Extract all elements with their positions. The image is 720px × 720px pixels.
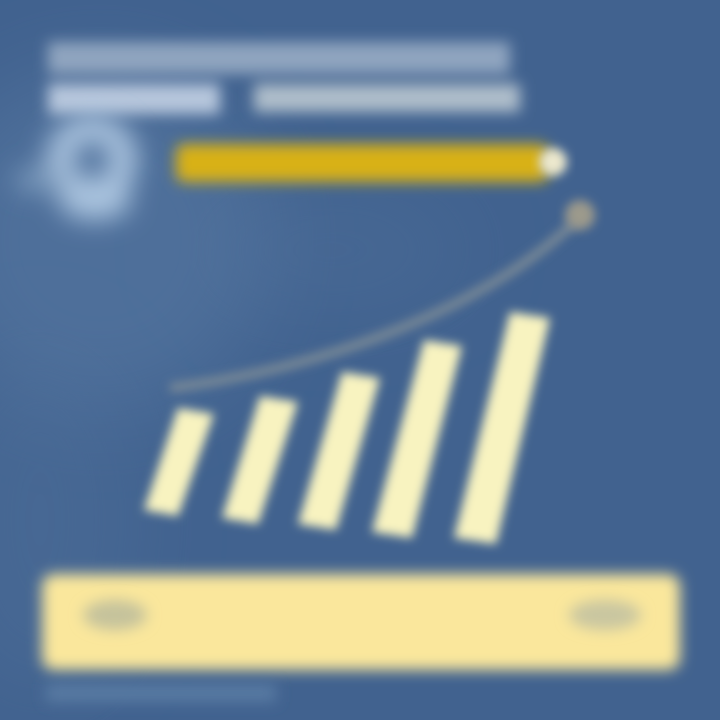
progress bar bbox=[176, 144, 567, 182]
progress bar end cap bbox=[539, 148, 567, 176]
icon: ring bbox=[14, 128, 131, 220]
title: two blurred text lines bbox=[48, 42, 520, 114]
bar chart: five slanted rising bars bbox=[144, 312, 550, 544]
footer note bbox=[46, 684, 276, 702]
right label bbox=[569, 600, 641, 630]
trend curve with arrow marker bbox=[170, 200, 595, 388]
bottom panel bbox=[42, 574, 680, 670]
left label bbox=[83, 600, 147, 630]
arrow marker bbox=[565, 200, 595, 230]
